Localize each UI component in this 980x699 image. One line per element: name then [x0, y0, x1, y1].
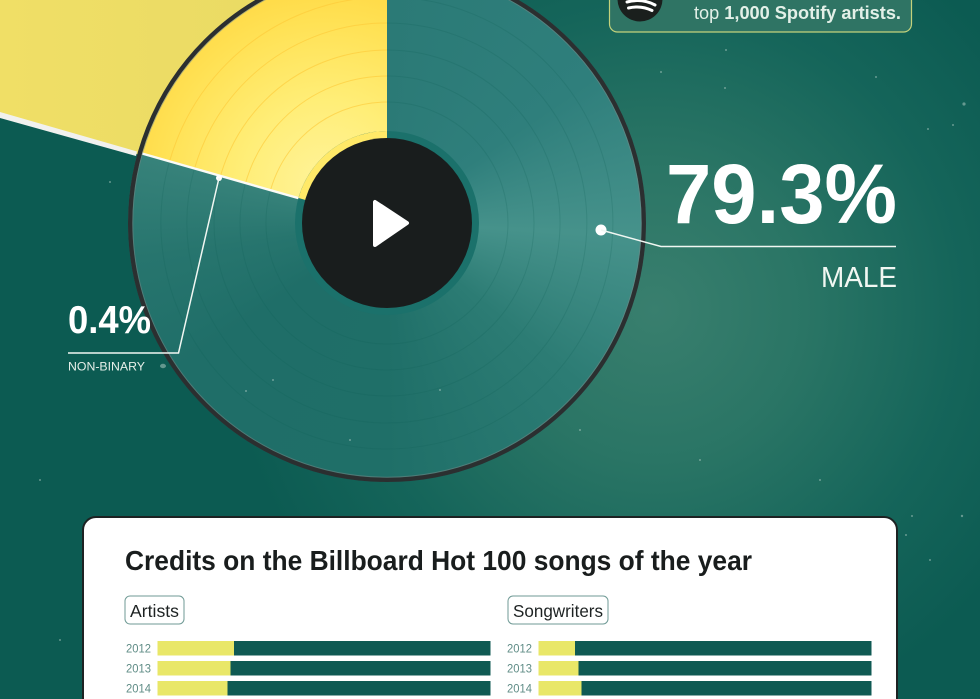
songwriters bar 2012: [507, 641, 872, 656]
icon: Spotify logo: [618, 0, 662, 22]
songwriters bar 2012: 2012: [507, 644, 532, 656]
panel: Billboard credits: [83, 517, 897, 699]
artists tag: [125, 596, 184, 624]
songwriters bar 2014: 2014: [507, 684, 533, 696]
artists bar 2014: [126, 681, 490, 696]
record platter base: [128, 0, 646, 482]
white divider outside disc: [0, 112, 137, 156]
icon: play triangle: [375, 202, 407, 245]
songwriters bar 2013: 2013: [507, 664, 532, 676]
stat: non-binary share: [68, 175, 222, 374]
yellow background sector: [0, 0, 300, 155]
white divider inside disc: [142, 154, 305, 200]
record hub with play button: [302, 138, 472, 308]
non-binary label: NON-BINARY: [68, 360, 145, 374]
artists tag: Artists: [130, 601, 179, 621]
yellow record wedge: [142, 0, 387, 223]
non-binary leader line: [68, 175, 222, 353]
artists bar 2013: [126, 661, 490, 676]
artists bar 2014: 2014: [126, 684, 152, 696]
songwriters tag: Songwriters: [513, 601, 603, 621]
songwriters bar 2014: [507, 681, 872, 696]
inner label ring: [295, 131, 479, 315]
callout: Spotify artists: [610, 0, 912, 32]
panel card: [83, 517, 897, 699]
record grooves: [164, 0, 614, 336]
panel heading: Credits on the Billboard Hot 100 songs of the year: [125, 545, 752, 576]
male leader line: [596, 224, 896, 246]
record outer rim: [130, 0, 644, 480]
artists bar 2013: 2013: [126, 664, 151, 676]
chart: artists: [125, 596, 490, 696]
male percentage: 79.3%: [666, 147, 897, 241]
songwriters bar 2013: [507, 661, 872, 676]
artists bar 2012: 2012: [126, 644, 151, 656]
male label: MALE: [821, 262, 897, 294]
artists bar 2012: [126, 641, 490, 656]
non-binary percentage: 0.4%: [68, 299, 151, 342]
songwriters tag: [508, 596, 608, 624]
stat: male share: [596, 147, 897, 294]
callout text: top 1,000 Spotify artists.: [694, 3, 901, 23]
chart: songwriters: [507, 596, 872, 696]
